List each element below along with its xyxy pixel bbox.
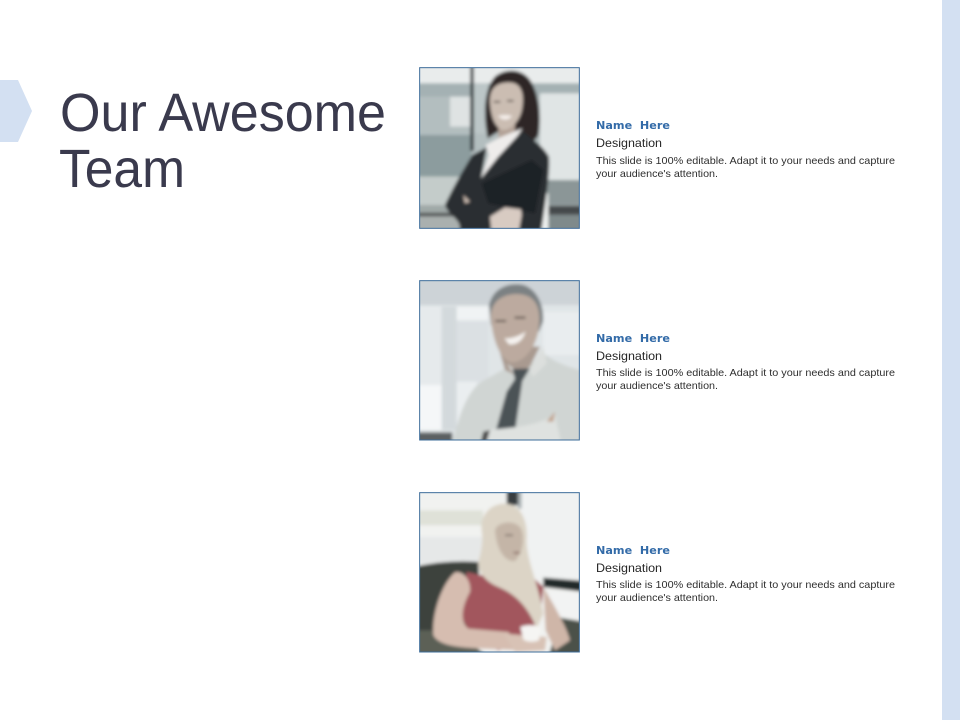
description [596, 580, 895, 604]
title: Our Awesome [60, 83, 386, 143]
photo border [420, 68, 579, 228]
team member 1 [415, 60, 895, 233]
photo: blonde woman with cup [419, 492, 580, 652]
description: your audience's attention. [596, 381, 718, 392]
photo border [420, 493, 579, 652]
name: Name Here [596, 120, 670, 132]
description [596, 368, 895, 392]
name: Name Here [596, 545, 670, 557]
description [596, 156, 895, 180]
photo: smiling man with tie [419, 280, 580, 440]
title [59, 83, 386, 199]
designation: Designation [596, 561, 662, 575]
team member 2 [415, 275, 895, 446]
right side accent strip [942, 0, 960, 720]
description: This slide is 100% editable. Adapt it to your needs and capture [596, 580, 895, 591]
description: your audience's attention. [596, 169, 718, 180]
designation: Designation [596, 136, 662, 150]
description: This slide is 100% editable. Adapt it to your needs and capture [596, 156, 895, 167]
team member 3 [415, 487, 895, 657]
chevron title marker [0, 80, 32, 142]
description: your audience's attention. [596, 593, 718, 604]
designation: Designation [596, 349, 662, 363]
title: Team [59, 139, 185, 199]
photo: woman in dark blazer [419, 67, 580, 229]
description: This slide is 100% editable. Adapt it to your needs and capture [596, 368, 895, 379]
name: Name Here [596, 333, 670, 345]
photo border [420, 281, 579, 440]
